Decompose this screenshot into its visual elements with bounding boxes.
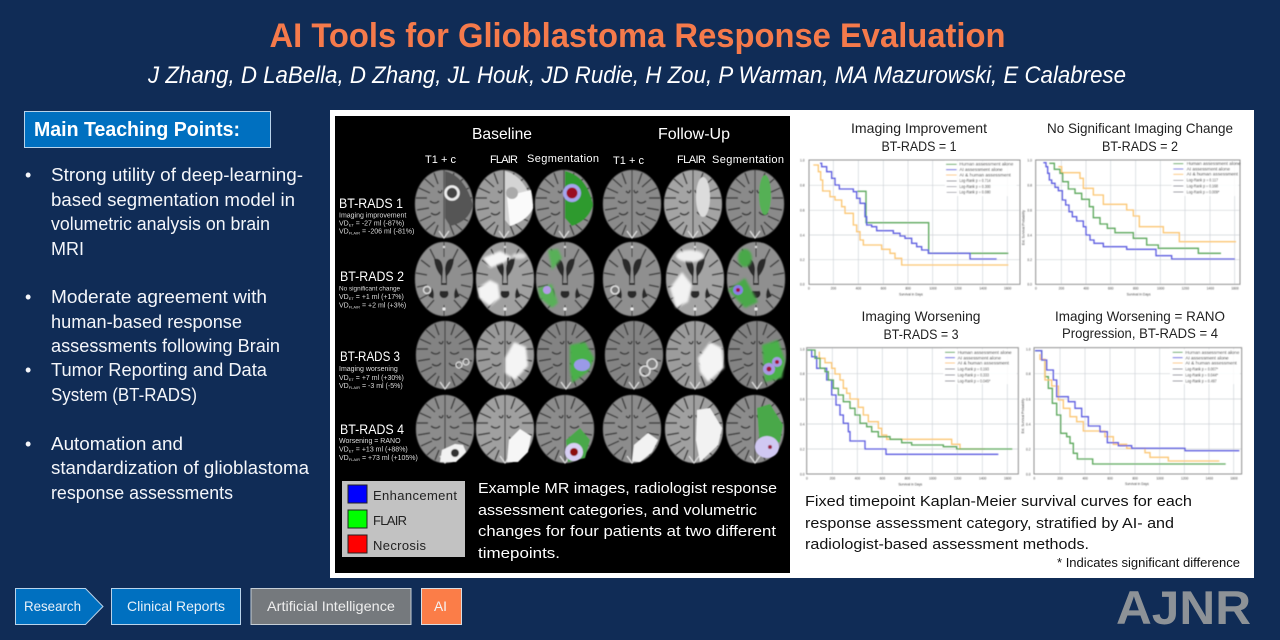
chart: Kaplan-Meier BT-RADS 1: 400 (856, 287, 861, 291)
chart: Kaplan-Meier BT-RADS 3: 1.0 (800, 348, 805, 352)
brain images row 1 (415, 170, 784, 238)
chart: Kaplan-Meier BT-RADS 2: 1400 (1207, 287, 1214, 291)
bullet: utility: based segmentation model in (51, 190, 295, 210)
chart: Kaplan-Meier BT-RADS 1: 0.6 (800, 209, 805, 213)
chart: Kaplan-Meier BT-RADS 3: Human assessment alone (958, 350, 1012, 355)
chart: Kaplan-Meier BT-RADS 3: 0.2 (800, 447, 805, 451)
chart: Kaplan-Meier BT-RADS 1: 600 (881, 287, 886, 291)
label: BT-RADS 2: = +2 ml (+3%) (360, 302, 406, 310)
chart: Kaplan-Meier BT-RADS 3: 0.6 (800, 397, 805, 401)
column headings: FLAIR (490, 154, 518, 166)
chart: Kaplan-Meier BT-RADS 2: Est. Survival Probability (1022, 210, 1026, 245)
bullet: agreement: human-based response (51, 312, 242, 332)
chart: Kaplan-Meier BT-RADS 3: 200 (830, 476, 835, 480)
bullet: automation: response assessments (51, 483, 233, 503)
label: BT-RADS 4: ET (349, 448, 354, 454)
chart: Kaplan-Meier BT-RADS 1: AI assessment alone (959, 167, 1003, 172)
chart: Kaplan-Meier BT-RADS 1: 0.0 (800, 283, 805, 287)
chart: Kaplan-Meier BT-RADS 4: Survival in Days (1125, 482, 1149, 486)
tag: Artificial Intelligence (251, 588, 411, 624)
panel: MR images (335, 116, 790, 573)
tag: Artificial Intelligence: Artificial Intelligence (267, 598, 395, 614)
panel: main teaching points (24, 112, 310, 503)
row: BT-RADS 2 (339, 242, 785, 316)
heading: main teaching points (24, 112, 270, 148)
label: BT-RADS 2 (339, 268, 406, 310)
brain images row 2 (415, 242, 785, 316)
chart heading: BT-RADS 4: Imaging Worsening = RANO (1055, 308, 1225, 324)
heading: main teaching points: Main Teaching Points: (34, 119, 240, 141)
chart heading: BT-RADS 1: BT-RADS = 1 (882, 138, 957, 154)
chart: Kaplan-Meier BT-RADS 1: 200 (831, 287, 836, 291)
label: BT-RADS 4: VD (339, 455, 349, 462)
column headings: FLAIR (677, 154, 706, 166)
chart heading: BT-RADS 4 (1055, 308, 1225, 341)
chart: Kaplan-Meier BT-RADS 1: 0.8 (800, 184, 805, 188)
chart heading: BT-RADS 3: Imaging Worsening (862, 308, 980, 324)
logo: AJNR: AJNR (1116, 581, 1251, 634)
chart: Kaplan-Meier BT-RADS 4: Log-Rank p = 0.044* (1185, 372, 1218, 377)
chart: Kaplan-Meier BT-RADS 1: 0 (808, 287, 810, 291)
chart heading: BT-RADS 3 (862, 308, 980, 342)
chart: Kaplan-Meier BT-RADS 3: AI & human assessment (958, 361, 1010, 366)
chart: Kaplan-Meier BT-RADS 4: Log-Rank p = 0.007* (1185, 366, 1218, 371)
bullet: utility: Strong utility of deep-learning- (51, 165, 303, 185)
label: BT-RADS 2: VD (339, 302, 349, 310)
label: BT-RADS 1: = -206 ml (-81%) (360, 228, 414, 236)
chart: Kaplan-Meier BT-RADS 4: 600 (1107, 476, 1113, 480)
chart: Kaplan-Meier BT-RADS 3 (800, 348, 1018, 486)
chart: Kaplan-Meier BT-RADS 1: Log-Rank p = 0.300 (959, 184, 991, 189)
chart: Kaplan-Meier BT-RADS 1: Log-Rank p = 0.714 (959, 178, 991, 183)
chart: Kaplan-Meier BT-RADS 2: 0.6 (1027, 209, 1032, 213)
brain images row 4 (416, 395, 784, 463)
chart: Kaplan-Meier BT-RADS 3: 800 (905, 476, 910, 480)
chart: Kaplan-Meier BT-RADS 4: AI assessment alone (1185, 355, 1229, 360)
label: BT-RADS 2: No significant change (339, 286, 401, 292)
legend labels (373, 488, 457, 553)
chart: Kaplan-Meier BT-RADS 2 (1022, 159, 1241, 297)
label: BT-RADS 1: BT-RADS 1 (339, 195, 403, 211)
label: BT-RADS 2: FLAIR (349, 304, 360, 310)
chart: Kaplan-Meier BT-RADS 4: 0.8 (1026, 372, 1031, 376)
bullet: automation: • (25, 434, 31, 454)
label: BT-RADS 4: Worsening = RANO (339, 438, 401, 445)
chart heading: BT-RADS 2 (1047, 120, 1233, 154)
chart: Kaplan-Meier BT-RADS 4: 1200 (1181, 476, 1189, 480)
label: BT-RADS 1: ET (349, 222, 354, 228)
chart: Kaplan-Meier BT-RADS 4: 0.2 (1026, 447, 1031, 451)
label: BT-RADS 3: FLAIR (349, 385, 360, 390)
authors: J Zhang, D LaBella, D Zhang, JL Houk, JD Rudie, H Zou, P Warman, MA Mazurowski, E Calabrese (147, 62, 1126, 89)
bullet: agreement (25, 287, 280, 405)
chart: Kaplan-Meier BT-RADS 1: Human assessment alone (959, 162, 1014, 167)
swatch: FLAIR (348, 510, 367, 528)
chart: Kaplan-Meier BT-RADS 4: AI & human assessment (1185, 361, 1238, 366)
label: BT-RADS 4: = +73 ml (+105%) (360, 455, 418, 462)
bullet: automation (25, 434, 310, 503)
tag: Clinical Reports (112, 588, 240, 624)
chart: Kaplan-Meier BT-RADS 3: 0 (806, 476, 808, 480)
chart: Kaplan-Meier BT-RADS 3: 0.0 (800, 472, 805, 476)
chart: Kaplan-Meier BT-RADS 4: 0.4 (1026, 422, 1031, 426)
chart: Kaplan-Meier BT-RADS 2: 1000 (1157, 287, 1165, 291)
label: BT-RADS 3: ET (349, 377, 354, 382)
column headings: Follow-Up (658, 126, 730, 143)
chart: Kaplan-Meier BT-RADS 1: Log-Rank p = 0.080 (959, 190, 991, 195)
chart: Kaplan-Meier BT-RADS 4: 1000 (1156, 476, 1164, 480)
chart: Kaplan-Meier BT-RADS 2: 800 (1133, 287, 1139, 291)
chart: Kaplan-Meier BT-RADS 4: Human assessment alone (1185, 350, 1240, 355)
chart: Kaplan-Meier BT-RADS 2: 0.8 (1027, 184, 1032, 188)
chart: Kaplan-Meier BT-RADS 4: 1400 (1206, 476, 1213, 480)
label: BT-RADS 3: VD (339, 383, 349, 390)
bullet: utility (25, 165, 303, 259)
column headings: T1 + c (613, 155, 644, 167)
chart: Kaplan-Meier BT-RADS 2: 400 (1083, 287, 1089, 291)
tag: Research: Research (24, 598, 81, 614)
column headings (425, 126, 784, 167)
caption: MR images: changes for four patients at two different (478, 523, 777, 540)
label: BT-RADS 4: FLAIR (349, 457, 360, 462)
label: BT-RADS 3: = +7 ml (+30%) (354, 375, 404, 382)
bullet: automation: Automation and (51, 434, 183, 454)
chart: Kaplan-Meier BT-RADS 2: Log-Rank p = 0.009* (1187, 189, 1220, 194)
chart: Kaplan-Meier BT-RADS 2: Log-Rank p = 0.117 (1187, 177, 1218, 182)
chart heading: BT-RADS 3: BT-RADS = 3 (884, 326, 959, 342)
caption: MR images: Example MR images, radiologist response (478, 480, 777, 497)
caption: MR images: assessment categories, and volumetric (478, 502, 758, 519)
tag: Research (16, 588, 103, 624)
label: BT-RADS 3: = -3 ml (-5%) (360, 383, 403, 390)
label: BT-RADS 4: VD (339, 446, 349, 454)
chart: Kaplan-Meier BT-RADS 3: 1000 (929, 476, 937, 480)
chart: Kaplan-Meier BT-RADS 1: 1400 (979, 287, 987, 291)
chart: Kaplan-Meier BT-RADS 4 (1021, 348, 1242, 486)
title: AI Tools for Glioblastoma Response Evaluation (270, 17, 1006, 55)
chart: Kaplan-Meier BT-RADS 4: 400 (1082, 476, 1088, 480)
bullet: utility: • (25, 165, 31, 185)
chart: Kaplan-Meier BT-RADS 1: 0.4 (800, 233, 805, 237)
column headings: Segmentation (527, 153, 599, 165)
chart: Kaplan-Meier BT-RADS 4: 800 (1132, 476, 1138, 480)
chart: Kaplan-Meier BT-RADS 4: 1.0 (1026, 348, 1031, 352)
panel: figure background (330, 110, 1254, 578)
chart: Kaplan-Meier BT-RADS 4: 200 (1057, 476, 1063, 480)
footnote: * Indicates significant difference (1057, 555, 1240, 570)
label: BT-RADS 2: BT-RADS 2 (340, 268, 404, 284)
row: BT-RADS 4 (339, 395, 784, 463)
chart heading: BT-RADS 2: No Significant Imaging Change (1047, 120, 1233, 136)
chart: Kaplan-Meier BT-RADS 1 (800, 159, 1020, 297)
chart: Kaplan-Meier BT-RADS 4: Log-Rank p = 0.497 (1185, 379, 1217, 384)
label: BT-RADS 1: = -27 ml (-87%) (354, 220, 404, 228)
bullet: agreement: assessments following Brain (51, 336, 280, 356)
caption: MR images: timepoints. (478, 545, 560, 562)
chart: Kaplan-Meier BT-RADS 1: AI & human assessment (959, 172, 1012, 177)
chart: Kaplan-Meier BT-RADS 4: 1600 (1230, 476, 1238, 480)
swatch: necrosis (348, 535, 367, 553)
chart: Kaplan-Meier BT-RADS 3: Log-Rank p = 0.193 (958, 366, 989, 371)
chart: Kaplan-Meier BT-RADS 4: 0.0 (1026, 472, 1031, 476)
chart: Kaplan-Meier BT-RADS 2: 1600 (1231, 287, 1239, 291)
chart: Kaplan-Meier BT-RADS 4: Est. Survival Probability (1021, 398, 1025, 433)
brain images row 3 (416, 321, 786, 389)
chart: Kaplan-Meier BT-RADS 4: 0.6 (1026, 397, 1031, 401)
chart: Kaplan-Meier BT-RADS 2: AI & human assessment (1187, 172, 1239, 177)
chart: Kaplan-Meier BT-RADS 1: 1.0 (800, 159, 805, 163)
label: BT-RADS 1: VD (339, 220, 349, 228)
chart: Kaplan-Meier BT-RADS 2: 0.4 (1027, 233, 1032, 237)
chart heading: BT-RADS 4: Progression, BT-RADS = 4 (1062, 325, 1218, 341)
label: BT-RADS 3 (339, 348, 404, 390)
chart: Kaplan-Meier BT-RADS 3: Log-Rank p = 0.045* (958, 379, 991, 384)
chart: Kaplan-Meier BT-RADS 3: 0.4 (800, 422, 805, 426)
chart: Kaplan-Meier BT-RADS 2: 0 (1035, 287, 1037, 291)
legend: segmentation colours (342, 481, 465, 557)
chart heading: BT-RADS 1 (851, 120, 987, 154)
chart: Kaplan-Meier BT-RADS 1: 0.2 (800, 258, 805, 262)
label: BT-RADS 4 (339, 421, 418, 462)
bullet: agreement: System (BT-RADS) (51, 385, 197, 405)
chart: Kaplan-Meier BT-RADS 2: 200 (1059, 287, 1064, 291)
chart: Kaplan-Meier BT-RADS 2: 1200 (1182, 287, 1189, 291)
chart: Kaplan-Meier BT-RADS 2: AI assessment alone (1187, 166, 1231, 171)
chart: Kaplan-Meier BT-RADS 3: 0.8 (800, 372, 805, 376)
chart: Kaplan-Meier BT-RADS 2: 0.0 (1027, 283, 1032, 287)
column headings: T1 + c (425, 154, 456, 166)
legend labels: Necrosis (373, 538, 426, 553)
chart: Kaplan-Meier BT-RADS 2: 1.0 (1027, 159, 1032, 163)
label: BT-RADS 3: BT-RADS 3 (340, 348, 400, 364)
chart: Kaplan-Meier BT-RADS 3: 1400 (979, 476, 987, 480)
chart: Kaplan-Meier BT-RADS 3: Survival in Days (898, 482, 923, 486)
label: BT-RADS 2: VD (339, 294, 349, 301)
chart: Kaplan-Meier BT-RADS 2: Human assessment alone (1187, 161, 1241, 166)
chart: Kaplan-Meier BT-RADS 3: Log-Rank p = 0.333 (958, 372, 989, 377)
chart heading: BT-RADS 1: Imaging Improvement (851, 120, 987, 136)
label: BT-RADS 1: Imaging improvement (339, 212, 406, 220)
caption: survival curves: response assessment category, stratified by AI- and (805, 515, 1174, 532)
bullet: utility: volumetric analysis on brain (51, 214, 270, 234)
chart heading: BT-RADS 2: BT-RADS = 2 (1102, 138, 1178, 154)
legend labels: FLAIR (373, 513, 407, 528)
chart: Kaplan-Meier BT-RADS 1: 1000 (929, 287, 937, 291)
chart: Kaplan-Meier BT-RADS 3: AI assessment alone (958, 355, 1002, 360)
caption: survival curves: Fixed timepoint Kaplan-Meier survival curves for each (805, 493, 1192, 510)
label: BT-RADS 3: VD (339, 375, 349, 382)
label: BT-RADS 3: Imaging worsening (339, 366, 398, 373)
tag: Clinical Reports: Clinical Reports (127, 598, 225, 614)
bullet: utility: MRI (51, 239, 84, 259)
column headings: Baseline (472, 126, 532, 143)
tag: AI (422, 588, 462, 624)
chart: Kaplan-Meier BT-RADS 2: Survival in Days (1127, 293, 1151, 297)
label: BT-RADS 4: = +13 ml (+88%) (354, 446, 408, 454)
row: BT-RADS 3 (339, 321, 786, 390)
bullet: agreement: • (25, 287, 31, 307)
chart: Kaplan-Meier BT-RADS 1: 1200 (954, 287, 962, 291)
chart: Kaplan-Meier BT-RADS 3: 1600 (1004, 476, 1012, 480)
column headings: Segmentation (712, 154, 784, 166)
label: BT-RADS 1: VD (339, 228, 349, 236)
label: BT-RADS 2: = +1 ml (+17%) (354, 294, 404, 301)
chart: Kaplan-Meier BT-RADS 2: 0.2 (1027, 258, 1032, 262)
bullet: agreement: Tumor Reporting and Data (51, 360, 268, 380)
row: BT-RADS 1 (339, 170, 784, 238)
caption: survival curves: radiologist-based assessment methods. (805, 536, 1089, 553)
chart: Kaplan-Meier BT-RADS 2: Log-Rank p = 0.168 (1187, 183, 1218, 188)
chart: Kaplan-Meier BT-RADS 1: 800 (905, 287, 911, 291)
chart: Kaplan-Meier BT-RADS 2: 600 (1108, 287, 1114, 291)
chart: Kaplan-Meier BT-RADS 3: 600 (880, 476, 885, 480)
label: BT-RADS 1: FLAIR (349, 230, 360, 236)
label: BT-RADS 1 (339, 195, 414, 236)
caption: survival curves (805, 493, 1192, 553)
swatch: enhancement (348, 485, 367, 503)
chart: Kaplan-Meier BT-RADS 1: Survival in Days (899, 293, 923, 297)
chart: Kaplan-Meier BT-RADS 3: 1200 (954, 476, 962, 480)
label: BT-RADS 2: ET (349, 296, 354, 301)
tag: AI: AI (434, 598, 447, 614)
bullet: agreement: Moderate agreement with (51, 287, 267, 307)
label: BT-RADS 4: BT-RADS 4 (340, 421, 404, 437)
chart: Kaplan-Meier BT-RADS 1: 1600 (1004, 287, 1012, 291)
bullet: agreement: • (25, 360, 31, 380)
legend labels: Enhancement (373, 488, 457, 503)
chart: Kaplan-Meier BT-RADS 4: 0 (1033, 476, 1035, 480)
caption: MR images (478, 480, 777, 562)
bullet: automation: standardization of glioblastoma (51, 458, 310, 478)
chart: Kaplan-Meier BT-RADS 3: 400 (855, 476, 860, 480)
